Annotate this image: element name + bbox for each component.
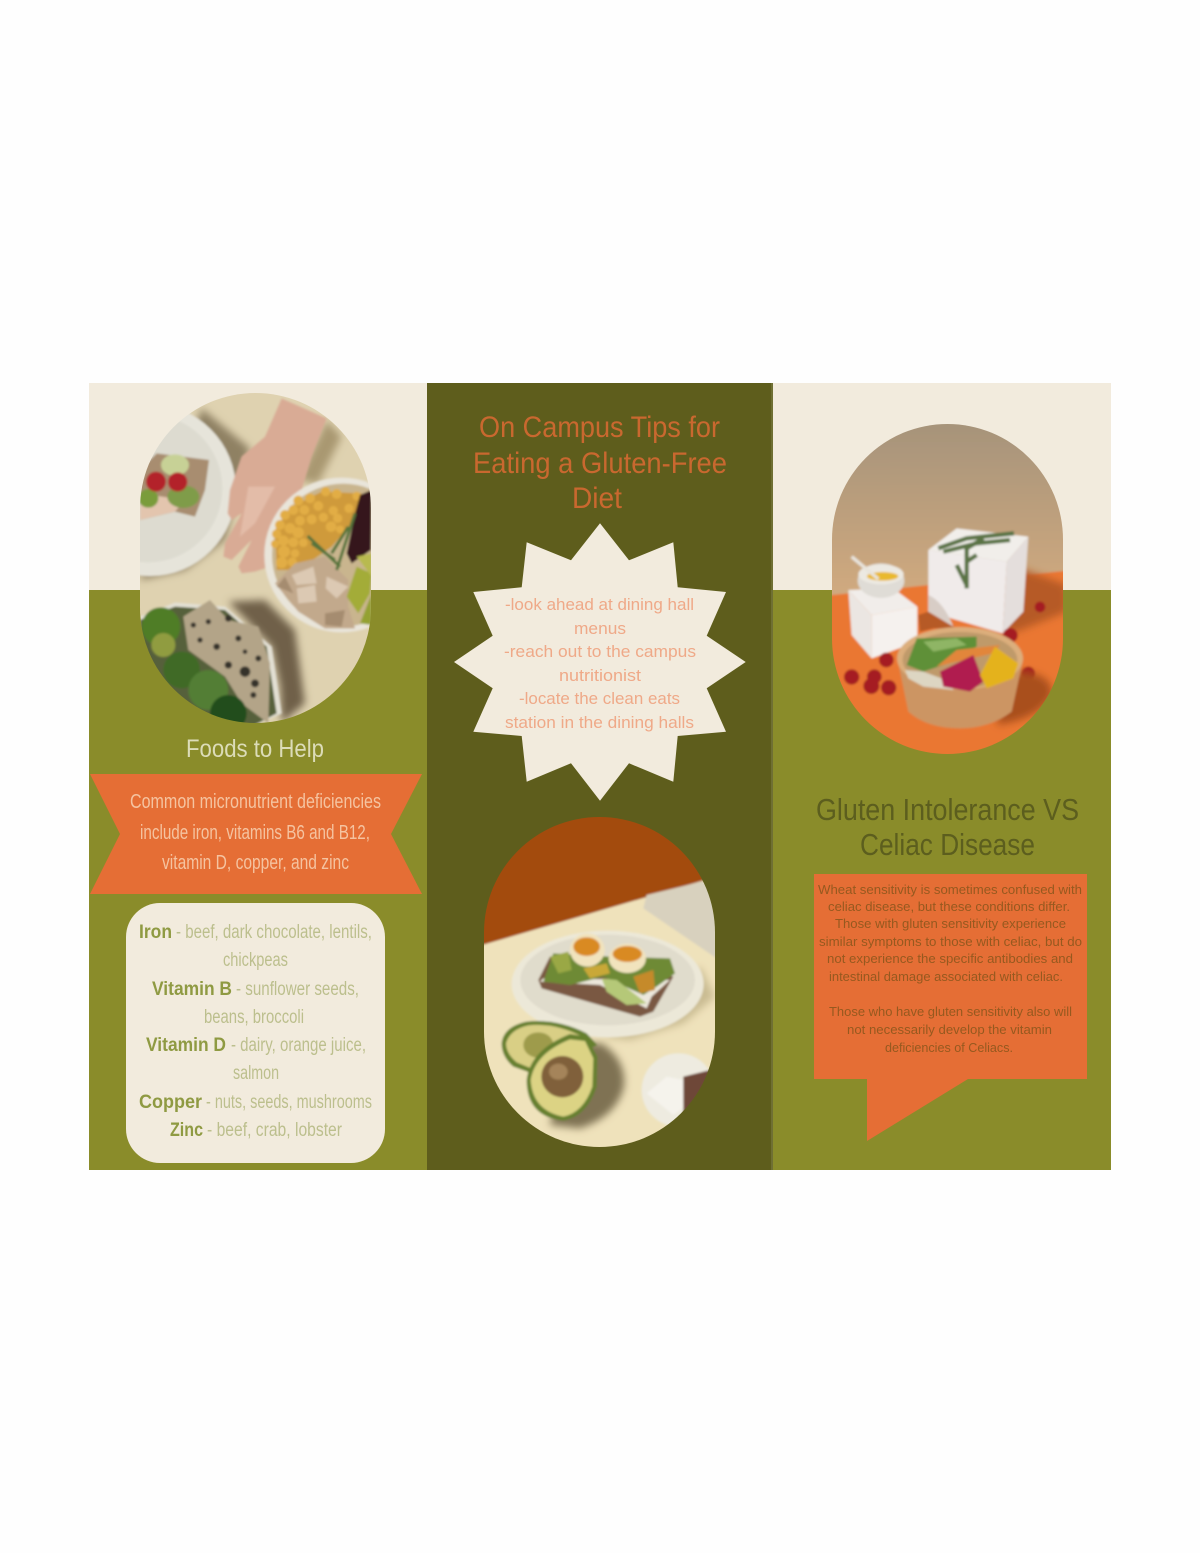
starburst: campus tips list: nutritionist (559, 666, 641, 685)
speech bubble: explanation of differences: not experience the specific antibodies and (827, 952, 1073, 966)
card: foods by nutrient: Iron (139, 922, 172, 943)
heading: on campus tips: Eating a Gluten-Free (473, 447, 727, 480)
card: foods by nutrient: salmon (233, 1063, 279, 1084)
heading: foods to help: Foods to Help (186, 735, 324, 763)
heading: gluten intolerance vs celiac disease (816, 792, 1079, 862)
ribbon: micronutrient deficiencies: vitamin D, copper, and zinc (162, 852, 349, 874)
speech bubble: explanation of differences: not necessarily develop the vitamin (847, 1023, 1052, 1037)
heading: on campus tips: Diet (572, 482, 623, 515)
photo: plates of chicken, chickpeas and broccoli (140, 393, 371, 723)
ribbon: micronutrient deficiencies: include iron, vitamins B6 and B12, (140, 822, 370, 844)
card: foods by nutrient: Vitamin B (152, 979, 232, 1000)
ribbon: micronutrient deficiencies (90, 774, 422, 894)
panel: on campus tips (427, 383, 773, 1170)
heading: on campus tips: On Campus Tips for (479, 411, 720, 444)
card: foods by nutrient: Zinc (170, 1120, 203, 1141)
card: foods by nutrient: - sunflower seeds, (236, 979, 359, 1000)
speech bubble: explanation of differences: Wheat sensitivity is sometimes confused with (818, 883, 1082, 897)
starburst: campus tips list: -reach out to the campus (504, 642, 696, 661)
card: foods by nutrient (126, 903, 385, 1163)
card: foods by nutrient: beans, broccoli (204, 1007, 304, 1028)
card: foods by nutrient: chickpeas (223, 950, 288, 971)
card: foods by nutrient: - dairy, orange juice, (231, 1035, 366, 1056)
speech bubble: explanation of differences (814, 874, 1087, 1141)
heading: on campus tips (473, 411, 727, 515)
card: foods by nutrient: Copper (139, 1092, 203, 1113)
starburst: campus tips list (454, 523, 746, 801)
starburst: campus tips list: station in the dining halls (505, 713, 694, 732)
speech bubble: explanation of differences: celiac disease, but these conditions differ. (828, 900, 1070, 914)
card: foods by nutrient: - beef, dark chocolate, lentils, (176, 922, 372, 943)
ribbon: micronutrient deficiencies: Common micronutrient deficiencies (130, 791, 381, 813)
starburst: campus tips list: -look ahead at dining hall (505, 595, 694, 614)
card: foods by nutrient: - nuts, seeds, mushrooms (206, 1092, 372, 1113)
speech bubble: explanation of differences: similar symptoms to those with celiac, but do (819, 935, 1082, 949)
panel: foods to help (64, 383, 427, 1170)
starburst: campus tips list: -locate the clean eats (519, 689, 680, 708)
photo: salad bowl on white blocks (827, 418, 1067, 758)
speech bubble: explanation of differences: Those who have gluten sensitivity also will (829, 1005, 1072, 1019)
panel: gluten intolerance vs celiac disease (773, 383, 1111, 1170)
card: foods by nutrient: - beef, crab, lobster (207, 1120, 343, 1141)
card: foods by nutrient: Vitamin D (146, 1035, 226, 1056)
heading: gluten intolerance vs celiac disease: Gluten Intolerance VS (816, 792, 1079, 827)
speech bubble: explanation of differences: deficiencies of Celiacs. (885, 1041, 1013, 1055)
speech bubble: explanation of differences: Those with gluten sensitivity experience (835, 917, 1066, 931)
photo: avocado toast with eggs (480, 813, 720, 1150)
speech bubble: explanation of differences: intestinal damage associated with celiac. (829, 970, 1063, 984)
starburst: campus tips list: menus (574, 619, 626, 638)
heading: gluten intolerance vs celiac disease: Celiac Disease (860, 827, 1035, 862)
